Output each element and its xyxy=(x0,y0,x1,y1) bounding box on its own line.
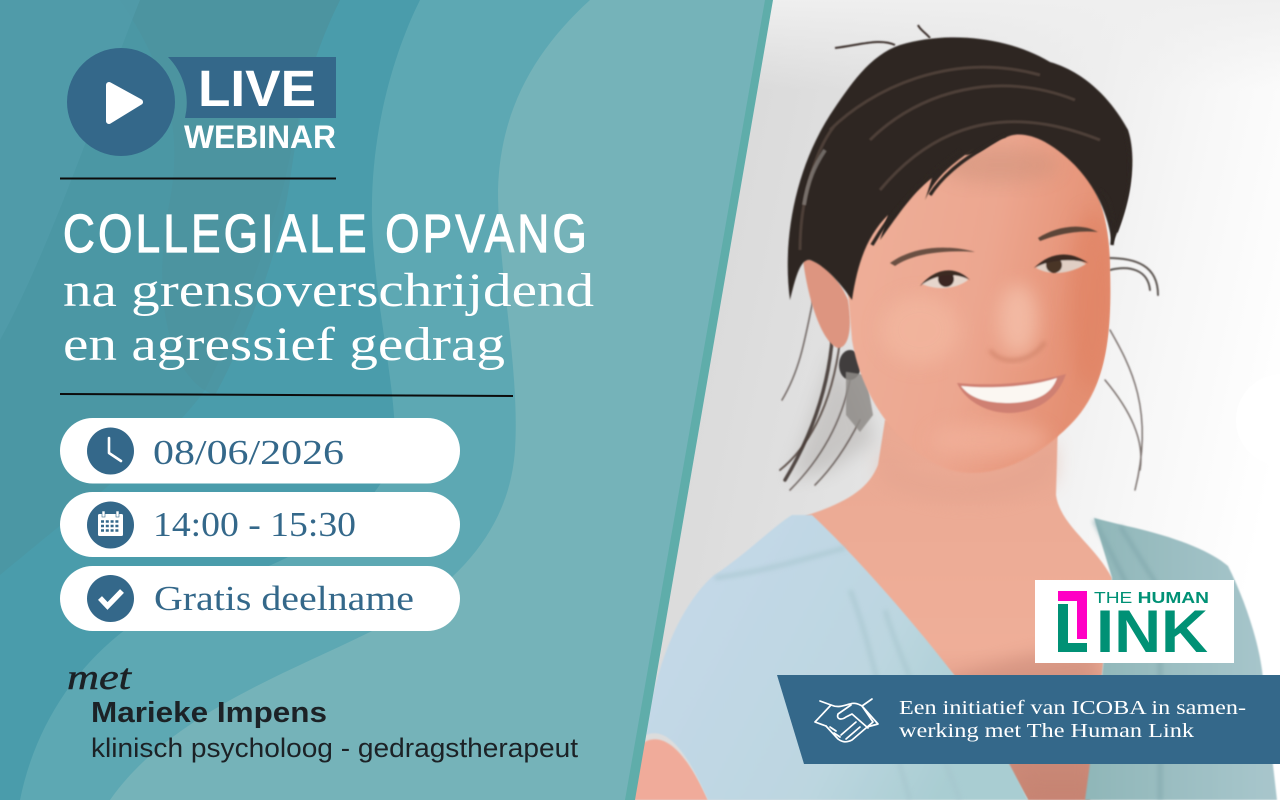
icon: handshake xyxy=(815,699,878,742)
pill: date xyxy=(60,418,460,484)
face xyxy=(846,120,1110,473)
stray hair back xyxy=(780,258,1158,490)
shirt folds xyxy=(715,548,960,800)
neck and chest xyxy=(805,420,1112,800)
wispy hair shadow at nape xyxy=(790,350,875,480)
title xyxy=(63,204,594,371)
live ribbon xyxy=(168,57,336,118)
logo: The Human Link xyxy=(1035,580,1234,665)
teal diagonal stripe xyxy=(625,0,773,800)
shirt left xyxy=(646,515,1028,800)
icon: clock xyxy=(87,428,134,474)
initiative banner xyxy=(777,675,1280,764)
left teal panel with organic wave shapes xyxy=(0,0,780,800)
nose xyxy=(990,342,1045,360)
speaker xyxy=(67,657,579,763)
photo background xyxy=(620,0,1280,800)
neck shadow xyxy=(880,440,1056,502)
hair highlights xyxy=(800,67,1100,250)
subtitle line 2: en agressief gedrag xyxy=(63,318,505,371)
banner text: Een initiatief van ICOBA in samen- xyxy=(899,697,1246,719)
icon: play circle xyxy=(67,48,175,156)
fringe strands xyxy=(872,130,1130,245)
webinar label: WEBINAR xyxy=(184,119,336,155)
pill: time xyxy=(60,492,460,557)
mouth xyxy=(957,374,1066,413)
earring xyxy=(839,350,873,432)
heading: COLLEGIALE OPVANG xyxy=(63,204,590,264)
banner text xyxy=(899,697,1246,742)
speaker role: klinisch psycholoog - gedragstherapeut xyxy=(91,733,579,763)
subtitle line 1: na grensoverschrijdend xyxy=(63,264,594,317)
met: met xyxy=(67,657,132,697)
speaker name: Marieke Impens xyxy=(91,697,327,729)
time text: 14:00 - 15:30 xyxy=(153,505,356,544)
pill: free participation xyxy=(60,566,460,631)
arm xyxy=(634,739,708,800)
portrait photo of the speaker xyxy=(634,25,1277,800)
logo mark xyxy=(1058,591,1087,652)
hair xyxy=(788,37,1132,300)
free participation text: Gratis deelname xyxy=(154,579,414,618)
logo word: INK xyxy=(1096,598,1208,665)
shirt right xyxy=(1085,518,1277,800)
live webinar badge xyxy=(67,48,336,156)
logo text: THE HUMAN xyxy=(1094,590,1209,607)
live label: LIVE xyxy=(198,60,316,117)
icon: calendar xyxy=(87,502,134,548)
eyes xyxy=(920,254,1088,288)
eyebrows xyxy=(890,248,975,266)
ear xyxy=(803,259,850,348)
banner text: werking met The Human Link xyxy=(899,720,1195,742)
face shading xyxy=(880,147,1116,458)
date text: 08/06/2026 xyxy=(153,433,344,472)
icon: check xyxy=(87,575,134,622)
